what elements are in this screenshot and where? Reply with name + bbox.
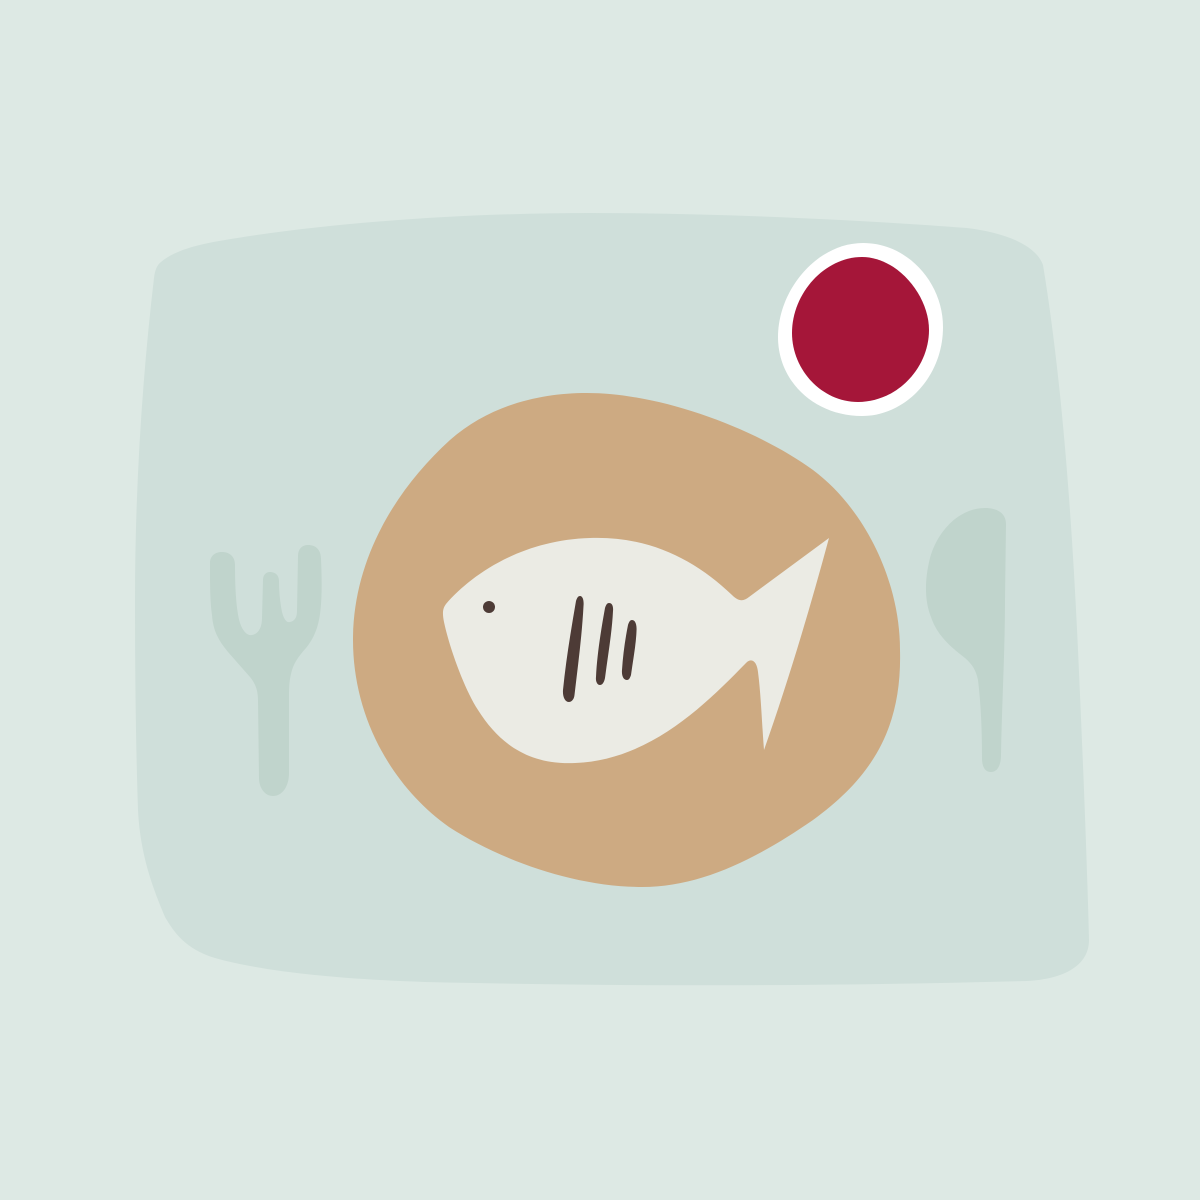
fish [443,538,829,763]
glass: red wine [792,257,929,402]
plate [353,393,900,887]
fish grill mark 2 [596,603,613,685]
fish eye [483,601,495,613]
icon: knife [926,508,1006,772]
fish body [443,538,829,763]
icon: fork [210,545,322,796]
placemat [135,213,1089,985]
fish grill mark 1 [563,596,584,702]
fish grill mark 3 [622,620,637,680]
glass: white rim [778,243,943,416]
